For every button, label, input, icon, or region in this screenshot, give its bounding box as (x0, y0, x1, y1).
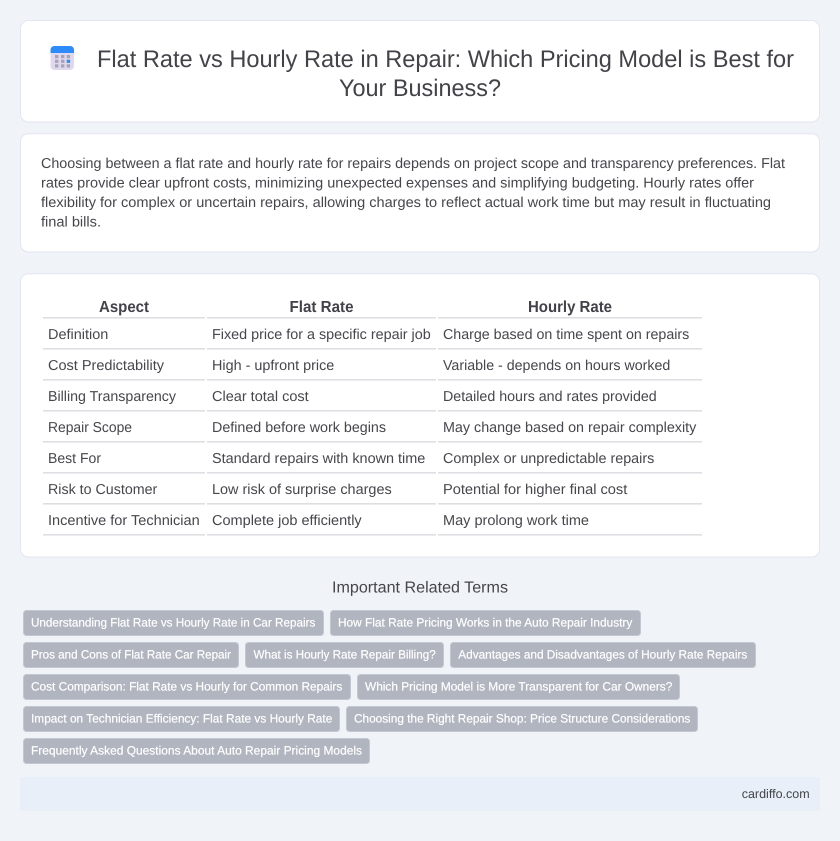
text block: introduction paragraph (41, 156, 785, 231)
tag (24, 738, 370, 764)
table row: Risk to Customer: Low risk of surprise charges (212, 482, 392, 498)
table row: Definition: Fixed price for a specific repair job (212, 327, 431, 343)
tag: Pros and Cons of Flat Rate Car Repair (31, 648, 231, 662)
table row: Cost Predictability: Cost Predictability (48, 358, 165, 374)
tag: Cost Comparison: Flat Rate vs Hourly for Common Repairs (31, 680, 342, 694)
text block: introduction paragraph: rates provide clear upfront costs, minimizing unexpected expenses and simplifying budgeting. Hourly rates offer (41, 176, 754, 192)
table row: Incentive for Technician (43, 513, 702, 536)
text block: introduction paragraph: Choosing between a flat rate and hourly rate for repairs depends on project scope and transparency preferences. Flat (41, 156, 785, 172)
table row: Billing Transparency: Clear total cost (212, 389, 309, 405)
table header: Hourly Rate (528, 299, 612, 316)
panel: title header (20, 20, 820, 122)
tag (24, 674, 350, 700)
table row: Cost Predictability: High - upfront price (212, 358, 334, 374)
tag (346, 706, 698, 732)
tag (358, 674, 680, 700)
table row: Repair Scope: Defined before work begins (212, 420, 386, 436)
title: Your Business? (339, 75, 501, 102)
title (97, 46, 794, 102)
tag: Choosing the Right Repair Shop: Price Structure Considerations (354, 712, 690, 726)
table row: Billing Transparency: Detailed hours and rates provided (443, 389, 657, 405)
table row: Billing Transparency (43, 389, 702, 412)
tag: What is Hourly Rate Repair Billing? (254, 648, 436, 662)
tag (330, 610, 640, 636)
table header (43, 299, 702, 319)
tag: Frequently Asked Questions About Auto Repair Pricing Models (31, 744, 362, 758)
table row: Best For (43, 451, 702, 474)
table row: Cost Predictability (43, 358, 702, 381)
icon: calendar (50, 46, 74, 70)
footer: cardiffo.com (742, 787, 810, 801)
table row: Billing Transparency: Billing Transparency (48, 389, 177, 405)
table row: Incentive for Technician: May prolong work time (443, 513, 589, 529)
tag: Impact on Technician Efficiency: Flat Rate vs Hourly Rate (31, 712, 333, 726)
tag (24, 610, 324, 636)
related terms tags (24, 610, 756, 764)
tag (24, 706, 340, 732)
title: Flat Rate vs Hourly Rate in Repair: Which Pricing Model is Best for (97, 46, 794, 73)
tag: Advantages and Disadvantages of Hourly Rate Repairs (458, 648, 747, 662)
text block: introduction paragraph: final bills. (41, 215, 101, 231)
tag (246, 642, 444, 668)
table row: Incentive for Technician: Incentive for Technician (48, 513, 200, 529)
table row: Definition: Charge based on time spent on repairs (443, 327, 689, 343)
table row: Risk to Customer: Risk to Customer (48, 482, 158, 498)
tag: Which Pricing Model is More Transparent for Car Owners? (365, 680, 673, 694)
table row: Repair Scope: Repair Scope (48, 420, 132, 436)
footer (20, 777, 820, 811)
table row: Best For: Complex or unpredictable repairs (443, 451, 654, 467)
tag (450, 642, 756, 668)
table row: Risk to Customer: Potential for higher final cost (443, 482, 627, 498)
table header: Aspect (99, 299, 150, 316)
text block: introduction paragraph: flexibility for complex or uncertain repairs, allowing charges to reflect actual work time but may result in fluctuating (41, 195, 771, 211)
table row: Incentive for Technician: Complete job efficiently (212, 513, 362, 529)
tag: How Flat Rate Pricing Works in the Auto Repair Industry (338, 616, 632, 630)
table row: Best For: Best For (48, 451, 101, 467)
tag: Understanding Flat Rate vs Hourly Rate in Car Repairs (31, 616, 315, 630)
tag (24, 642, 238, 668)
table row: Repair Scope (43, 420, 702, 443)
heading: Important Related Terms: Important Related Terms (332, 580, 508, 597)
table row: Risk to Customer (43, 482, 702, 505)
panel: introduction (20, 134, 820, 252)
table row: Best For: Standard repairs with known time (212, 451, 425, 467)
table row: Repair Scope: May change based on repair complexity (443, 420, 697, 436)
table row: Definition: Definition (48, 327, 108, 343)
table row: Definition (43, 327, 702, 350)
panel: comparison table (20, 274, 820, 557)
table row: Cost Predictability: Variable - depends on hours worked (443, 358, 670, 374)
table header: Flat Rate (290, 299, 354, 316)
